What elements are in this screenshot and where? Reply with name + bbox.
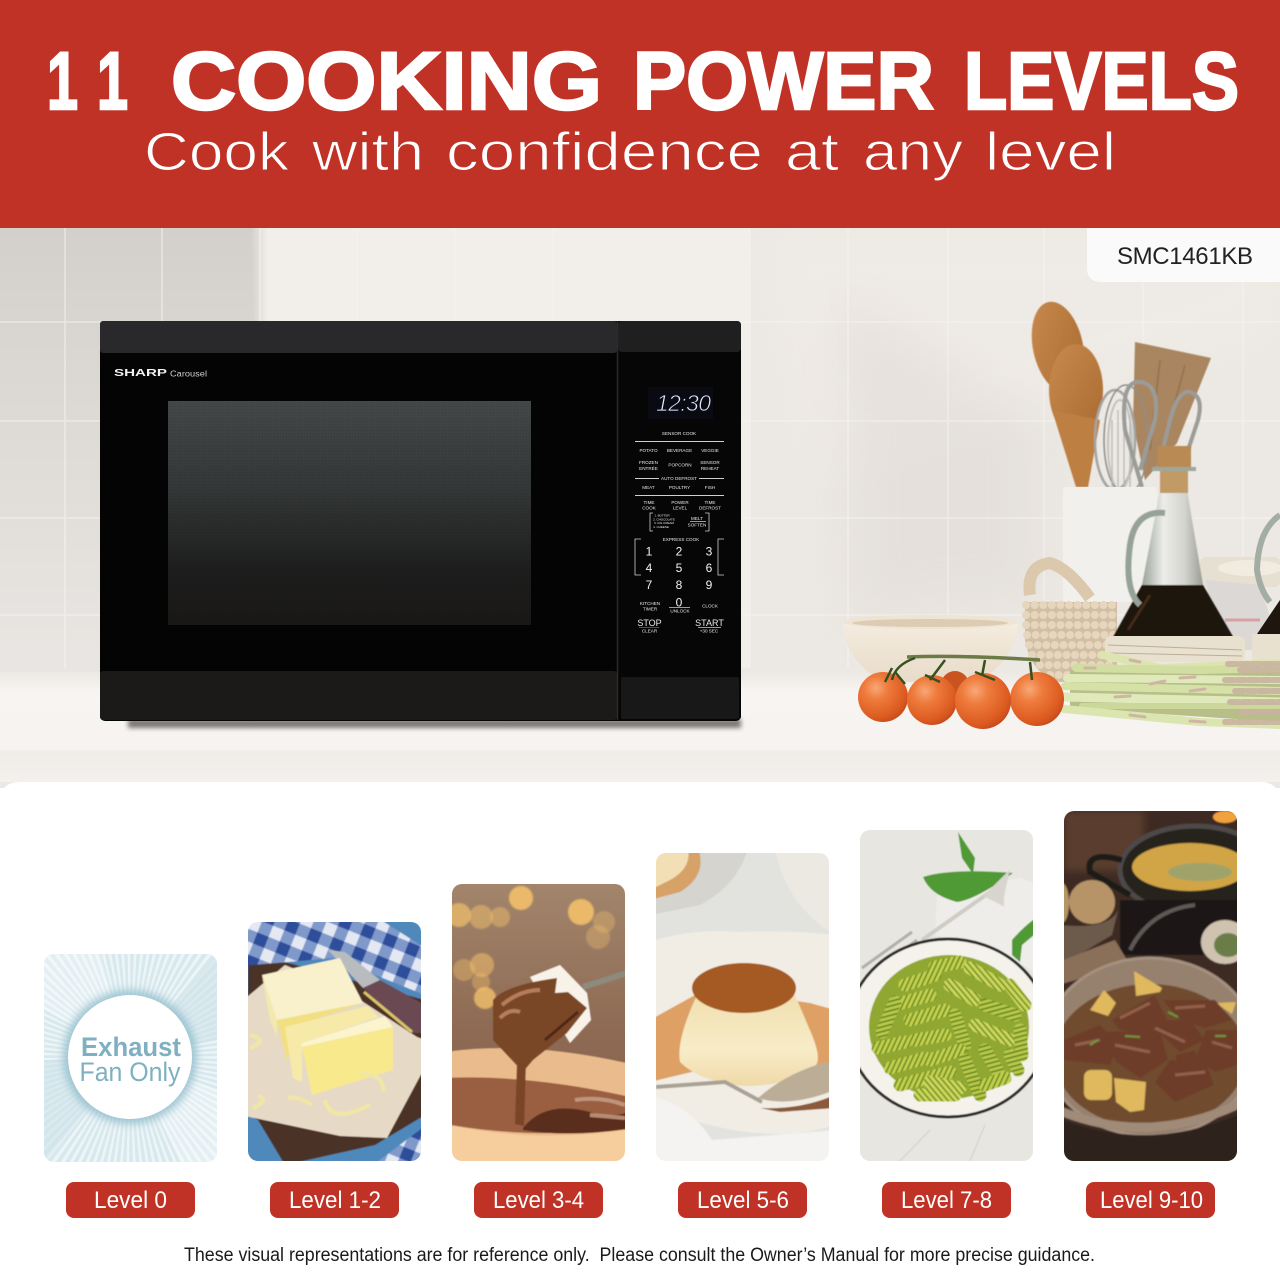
control panel labels: BEVERAGE	[667, 448, 692, 453]
number keypad: 0	[676, 596, 683, 610]
image: level 0 exhaust fan	[35, 954, 225, 1162]
header banner	[0, 0, 1280, 228]
bokeh lights	[447, 886, 615, 1009]
potato chunks	[1084, 971, 1236, 1112]
second bottle at edge	[1252, 515, 1280, 660]
butter curls	[250, 1035, 383, 1114]
image: level 1-2 butter	[248, 922, 421, 1161]
badge: level 5-6	[678, 1182, 807, 1218]
control panel labels: COOK	[642, 506, 657, 510]
wooden table	[1064, 940, 1126, 984]
title: LEVELS	[964, 36, 1239, 127]
white fan hub with text: Fan Only	[80, 1057, 181, 1087]
control panel labels: UNLOCK	[670, 608, 691, 614]
number keypad: 3	[706, 544, 713, 558]
beef chunks	[1064, 995, 1237, 1102]
image: level 9-10 beef stew	[1064, 811, 1237, 1161]
control panel labels: FISH	[705, 485, 715, 490]
brand logo	[114, 368, 207, 379]
back bowl and towel	[1200, 557, 1280, 650]
number keypad: 8	[676, 578, 683, 592]
control panel labels: +30 SEC	[700, 628, 719, 634]
kitchen background scene	[0, 228, 1280, 788]
fusilli pasta	[869, 955, 1029, 1099]
control panel labels: ENTRÉE	[639, 465, 658, 471]
control panel labels: POPCORN	[668, 462, 692, 468]
number keypad: 4	[646, 561, 653, 575]
control panel column	[618, 321, 741, 720]
wooden board	[248, 962, 425, 1165]
parchment paper	[240, 965, 425, 1138]
asparagus bundle	[1064, 655, 1280, 725]
rustic plate with stew	[1064, 955, 1237, 1161]
control panel labels: MELT	[691, 516, 703, 521]
checked cloth	[248, 922, 421, 994]
footer disclaimer: These visual representations are for reference only. Please consult the Owner’s Manual for more precise guidance.	[184, 1245, 1095, 1266]
subtitle: with	[311, 122, 424, 182]
badge: level 0	[66, 1182, 195, 1218]
basil leaves	[923, 832, 1040, 962]
kitchen props: utensils, bottle, basket, bowl, tomatoes and asparagus	[843, 297, 1280, 729]
bread in bowl	[1064, 878, 1118, 960]
image: level 7-8 pesto pasta	[860, 830, 1033, 1161]
control panel labels: 2. CHOCOLATE	[653, 517, 675, 521]
control panel labels: EXPRESS COOK	[663, 537, 700, 542]
white utensil crock	[1063, 487, 1157, 602]
woven bottle mat	[1105, 636, 1245, 662]
microwave oven	[100, 321, 741, 721]
number keypad: 9	[706, 578, 713, 592]
plate	[860, 936, 1033, 1119]
badge: level 3-4	[474, 1182, 603, 1218]
number keypad	[646, 544, 713, 610]
dark table base	[1064, 1115, 1237, 1161]
control panel labels: POWER	[671, 500, 689, 505]
control panel labels: REHEAT	[701, 466, 719, 471]
subtitle: at	[785, 122, 839, 182]
control panel labels: FROZEN	[639, 460, 658, 465]
background plate with flan	[656, 853, 746, 914]
bottom trim	[100, 671, 617, 720]
scalloped dessert plate	[650, 931, 835, 1134]
white fan hub with text: Exhaust	[81, 1032, 181, 1062]
badge: level 1-2: Level 1-2	[289, 1187, 381, 1214]
badge: level 5-6: Level 5-6	[697, 1187, 789, 1214]
digital clock display	[648, 387, 713, 419]
chocolate dip and drip	[493, 978, 587, 1126]
badge: level 7-8	[882, 1182, 1011, 1218]
number keypad: 7	[646, 578, 653, 592]
title: POWER	[633, 36, 934, 127]
brand logo: Carousel	[170, 370, 207, 378]
control panel labels: KITCHEN	[640, 601, 660, 606]
level badges	[66, 1182, 1215, 1218]
control panel labels: CLOCK	[702, 604, 719, 608]
title	[47, 36, 1239, 127]
napkin	[936, 879, 1033, 970]
control panel labels: AUTO DEFROST	[661, 476, 697, 481]
background doily plate	[776, 853, 829, 930]
fork stem	[583, 973, 627, 987]
badge: level 9-10: Level 9-10	[1100, 1187, 1203, 1214]
control panel labels: LEVEL	[673, 506, 688, 510]
control panel labels: TIME	[644, 500, 654, 505]
model number tag	[1087, 228, 1280, 282]
number keypad: 6	[706, 561, 713, 575]
caramel sauce pool	[650, 995, 835, 1082]
badge: level 9-10	[1086, 1182, 1215, 1218]
control panel labels: CLEAR	[642, 628, 658, 634]
cream bowl	[843, 615, 1018, 682]
napkin	[656, 1097, 829, 1161]
number keypad: 1	[646, 544, 653, 558]
control panel labels: VEGGIE	[701, 448, 719, 453]
fork	[862, 882, 1003, 985]
control panel labels: SENSOR	[700, 460, 720, 465]
background pot of soup	[1086, 823, 1237, 956]
image: level 5-6 flan	[650, 848, 835, 1166]
subtitle: any	[863, 122, 963, 182]
rope basket	[1025, 563, 1117, 682]
number keypad: 5	[676, 561, 683, 575]
control panel labels: SENSOR COOK	[662, 431, 697, 436]
control panel labels: TIME	[705, 500, 715, 505]
control panel labels: DEFROST	[699, 506, 721, 510]
brand logo: SHARP	[114, 368, 167, 379]
title: 1	[97, 36, 128, 127]
control panel labels: START	[695, 618, 724, 628]
small side bowl	[1200, 918, 1237, 966]
caramel top	[692, 963, 796, 1013]
marble vein	[900, 1125, 985, 1161]
subtitle: Cook	[144, 122, 290, 182]
badge: level 3-4: Level 3-4	[493, 1187, 584, 1214]
wooden spoons, spatula and whisks	[1024, 297, 1211, 495]
spoon	[656, 1060, 835, 1112]
control panel labels: POTATO	[639, 448, 658, 453]
control panel labels: SOFTEN	[688, 522, 706, 528]
subtitle: level	[985, 122, 1116, 182]
subtitle: confidence	[446, 122, 763, 182]
control panel labels: MEAT	[642, 485, 655, 490]
badge: level 1-2	[270, 1182, 399, 1218]
butter block	[262, 958, 393, 1095]
cherry tomatoes on the vine	[858, 656, 1064, 729]
white bottom panel	[0, 782, 1280, 1280]
control panel labels	[635, 431, 724, 634]
control panel labels: STOP	[637, 618, 662, 628]
steam	[1130, 905, 1195, 950]
control panel labels: POULTRY	[669, 485, 690, 490]
bowl	[452, 1048, 625, 1161]
model number tag: SMC1461KB	[1117, 243, 1253, 270]
image: level 3-4 melted chocolate	[452, 884, 625, 1161]
top trim	[100, 321, 617, 353]
control panel labels: 3. ICE CREAM	[654, 521, 674, 525]
title: 1	[47, 36, 78, 127]
badge: level 0: Level 0	[94, 1187, 167, 1214]
glass oil bottle with cork	[1113, 446, 1235, 640]
number keypad: 2	[676, 544, 683, 558]
control panel labels: 4. CHEESE	[653, 525, 669, 529]
badge: level 7-8: Level 7-8	[901, 1187, 992, 1214]
marshmallow	[530, 965, 591, 1043]
title: COOKING	[171, 36, 602, 127]
door window	[168, 401, 531, 625]
control panel labels: TIMER	[643, 606, 658, 612]
knife	[328, 950, 425, 1033]
control panel labels: 1. BUTTER	[654, 514, 670, 518]
digital clock display: 12:30	[656, 390, 711, 416]
flan body	[679, 995, 818, 1086]
subtitle	[144, 122, 1116, 182]
white fan hub with text	[68, 995, 192, 1119]
